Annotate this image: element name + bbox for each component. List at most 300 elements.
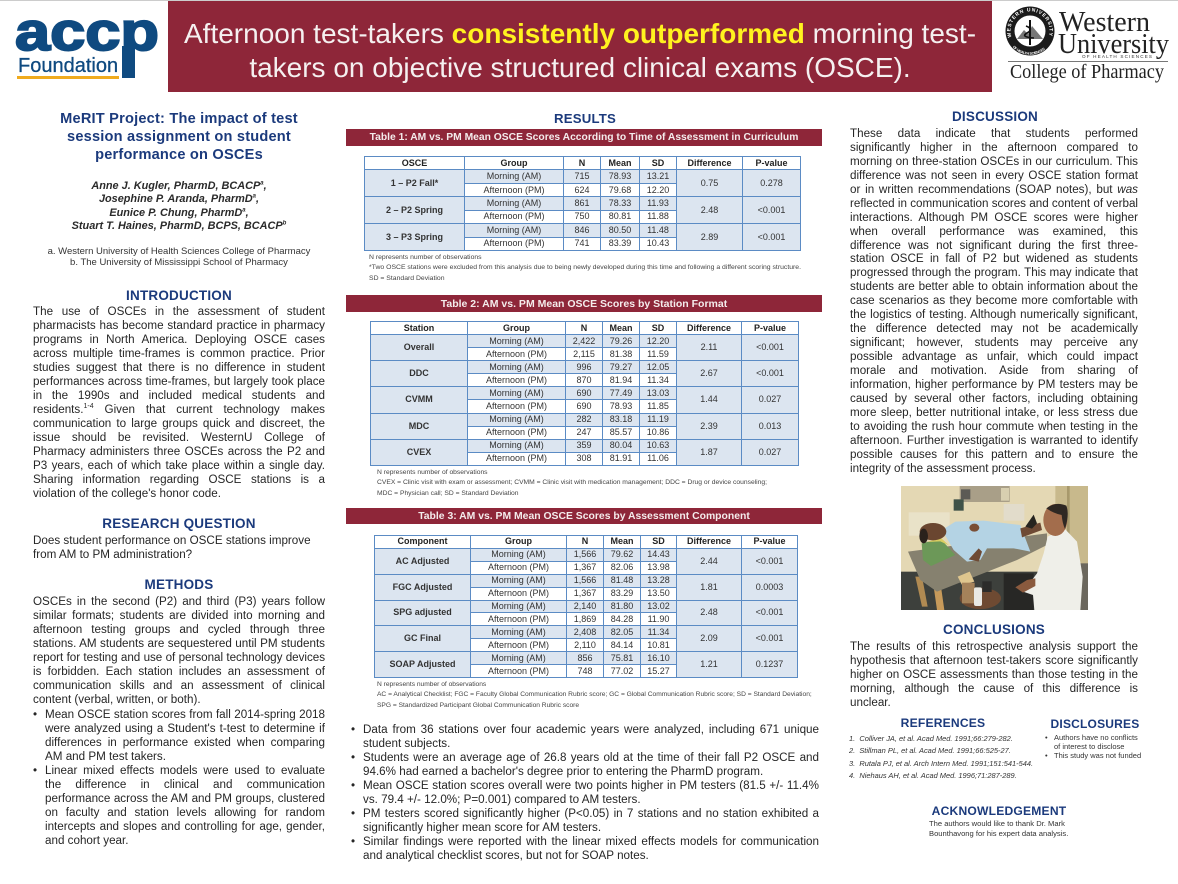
table 2: <0.001: [756, 368, 784, 378]
text: discussion: case scenarios as they become more comfortable with: [850, 294, 1138, 307]
affiliations: [48, 246, 310, 268]
table 1: 3 – P3 Spring: [386, 232, 443, 242]
table 2: Morning (AM): [489, 336, 544, 346]
table 1: 80.81: [609, 211, 631, 221]
text: discussion: These data indicate that students performed: [850, 127, 1138, 140]
table 3 notes: SPG = Standardized Participant Global Communication Rubric score: [377, 702, 579, 709]
table 2: 2,422: [573, 336, 595, 346]
table 2 title bar: Table 2: AM vs. PM Mean OSCE Scores by Station Format: [441, 298, 727, 310]
table 2: 247: [576, 427, 592, 437]
text: •: [33, 708, 37, 721]
table 1: 79.68: [609, 185, 631, 195]
table 1: 846: [574, 225, 590, 235]
table 2: 2.39: [700, 421, 718, 431]
authors: Eunice P. Chung, PharmDa,: [109, 207, 249, 219]
list: methods bullets: on faculty and station levels allowing for random: [45, 806, 325, 819]
table 3 notes: AC = Analytical Checklist; FGC = Faculty Global Communication Rubric score; GC = Global Communication Rubric score; SD = Standard Deviation;: [377, 691, 812, 698]
table 2: 12.05: [647, 362, 669, 372]
table 3: FGC Adjusted: [393, 582, 452, 592]
text: methods: [33, 595, 325, 706]
heading: methods: METHODS: [145, 577, 213, 592]
table 2: 85.57: [610, 427, 632, 437]
list: methods bullets: [33, 708, 325, 847]
table 3: 13.02: [647, 601, 670, 611]
table 3: AC Adjusted: [396, 556, 449, 566]
text: introduction: violation of the college's honor code.: [33, 487, 221, 500]
table 3: 1,869: [574, 614, 596, 624]
heading: acknowledgement: ACKNOWLEDGEMENT: [932, 804, 1066, 818]
text: •: [351, 835, 355, 848]
table 3: <0.001: [756, 556, 783, 566]
table 2: Station: [404, 323, 434, 333]
table 1: 741: [574, 238, 590, 248]
table 2: 2,115: [573, 349, 595, 359]
table 2: 13.03: [647, 388, 669, 398]
table 3: 81.48: [611, 575, 633, 585]
table 2: 2.11: [701, 342, 717, 352]
table 1: 78.93: [609, 171, 631, 181]
text: introduction: P3 years, each of which take place within a single day.: [33, 459, 325, 472]
text: methods: OSCEs in the second (P2) and third (P3) years follow: [33, 595, 325, 608]
list: results bullets: 94.6% had earned a bachelor's degree prior to entering the PharmD program.: [363, 765, 763, 778]
table 1: Morning (AM): [487, 198, 541, 208]
list: references: 2. Stillman PL, et al. Acad Med. 1991;66:525-27.: [849, 746, 1011, 755]
table 2: 996: [576, 362, 592, 372]
list: results bullets: Data from 36 stations over four academic years were analyzed, including 671 unique: [363, 723, 819, 736]
table 1: 11.88: [647, 211, 669, 221]
table 3: 1.21: [700, 659, 718, 669]
table 2: Afternoon (PM): [486, 401, 547, 411]
table 3 title bar: Table 3: AM vs. PM Mean OSCE Scores by Assessment Component: [418, 511, 750, 522]
affiliations: a. Western University of Health Sciences College of Pharmacy: [48, 246, 310, 257]
table 2: 11.34: [647, 375, 669, 385]
table 3: 1,566: [574, 575, 596, 585]
table 2: Morning (AM): [489, 362, 544, 372]
table 2: 308: [576, 453, 592, 463]
text: discussion: interactions. Although PM OSCE scores were higher: [850, 211, 1138, 224]
text: conclusions: The results of this retrospective analysis support the: [850, 640, 1138, 653]
authors: [72, 180, 286, 232]
table 2: 10.63: [647, 440, 669, 450]
table 1: Morning (AM): [487, 225, 541, 235]
text: discussion: significantly higher in the afternoon compared to: [850, 141, 1138, 154]
table 3: 2,110: [574, 640, 596, 650]
list: methods bullets: AM and PM test takers.: [45, 750, 166, 763]
table 1: 750: [574, 211, 590, 221]
table 1: 10.43: [647, 238, 669, 248]
table 2: N: [581, 323, 587, 333]
text: methods: similar formats; students are divided into morning and: [33, 609, 325, 622]
table 3: Afternoon (PM): [488, 562, 549, 572]
list: methods bullets: the difference in clinical and communication: [45, 778, 325, 791]
table 2: 12.20: [647, 336, 669, 346]
table 1: 13.21: [647, 171, 669, 181]
text: methods: stations. AM students are sequestered until PM students: [33, 637, 325, 650]
text: discussion: possible advantage as unfair, which could impact: [850, 350, 1138, 363]
text: research question: Does student performance on OSCE stations improve: [33, 534, 311, 547]
text: discussion: morale and motivation. Aside from sharing of: [850, 364, 1138, 377]
table 2: Morning (AM): [489, 440, 544, 450]
table 3: 2.44: [700, 556, 718, 566]
heading: disclosures: DISCLOSURES: [1051, 717, 1139, 731]
text: introduction: Pharmacy administers three OSCEs across the P2 and: [33, 445, 325, 458]
table 1 title bar: [346, 129, 822, 146]
text: discussion: [850, 127, 1138, 474]
table 1: [364, 156, 801, 251]
table 2: 690: [576, 388, 592, 398]
table 1: 2 – P2 Spring: [386, 205, 443, 215]
table 2: <0.001: [756, 342, 784, 352]
text: introduction: in the 1990s and included medical students and: [33, 389, 325, 402]
logo: Western University College of Pharmacy: WESTERN UNIVERSITY: [1006, 8, 1053, 38]
table 2: CVMM: [405, 394, 433, 404]
table 1: Afternoon (PM): [483, 238, 545, 248]
text: discussion: reflected in communication scores and content of verbal: [850, 197, 1138, 210]
text: introduction: issue should be revisited. WesternU College of: [33, 431, 325, 444]
table 3: Difference: [687, 536, 731, 546]
text: discussion: or in written recommendations (SOAP notes), but was: [850, 183, 1138, 196]
text: discussion: the difference detected may not be academically: [850, 322, 1138, 335]
table 2 notes: N represents number of observations: [377, 469, 488, 476]
table 3: 14.43: [647, 549, 670, 559]
table 3: N: [582, 536, 588, 546]
table 3: 1,367: [574, 588, 596, 598]
table 3: 2,408: [574, 627, 596, 637]
table 3: Afternoon (PM): [488, 640, 549, 650]
table 1: OSCE: [402, 158, 427, 168]
heading: conclusions: CONCLUSIONS: [943, 622, 1045, 637]
table 2: Afternoon (PM): [486, 453, 547, 463]
table 3: 82.05: [611, 627, 633, 637]
logo: ACCP Foundation: accp: [15, 2, 159, 62]
table 1: <0.001: [758, 232, 785, 242]
text: discussion: difference was not significant during the first three-: [850, 238, 1138, 252]
table 1 notes: N represents number of observations: [369, 254, 482, 261]
text: discussion: to avoiding the rush hour commute when testing in the: [850, 420, 1138, 433]
table 2: 10.86: [647, 427, 669, 437]
table 2: [370, 321, 799, 466]
table 2: 77.49: [610, 388, 632, 398]
text: introduction: across multiple time-frames is common practice. Prior: [33, 347, 325, 360]
list: disclosures: [1045, 733, 1141, 760]
text: introduction: performances across time-frames, but largely took place: [33, 375, 325, 388]
heading: introduction: INTRODUCTION: [126, 288, 232, 303]
table 2: 0.027: [759, 447, 781, 457]
table 2: 11.59: [647, 349, 669, 359]
table 2: Group: [503, 323, 530, 333]
table 1: Afternoon (PM): [483, 185, 545, 195]
heading: project title: session assignment on student: [67, 129, 291, 145]
text: discussion: students are better able to obtain information about the: [850, 280, 1138, 293]
table 2: 870: [576, 375, 592, 385]
table 2: Afternoon (PM): [486, 427, 547, 437]
table 3: 0.1237: [756, 659, 783, 669]
text: •: [351, 779, 355, 792]
text: acknowledgement: [929, 819, 1068, 838]
heading: results: RESULTS: [554, 111, 616, 126]
table 1: 80.50: [609, 225, 631, 235]
list: disclosures: of interest to disclose: [1054, 742, 1124, 751]
table 1: 715: [574, 171, 590, 181]
text: conclusions: hypothesis that afternoon test-takers score significantly: [850, 654, 1138, 667]
affiliations: b. The University of Mississippi School of Pharmacy: [70, 257, 288, 268]
text: discussion: difference was not seen in every OSCE station format: [850, 169, 1138, 182]
text: methods: communication skills and an assessment of clinical: [33, 679, 325, 692]
text: introduction: The use of OSCEs in the assessment of student: [33, 305, 325, 318]
table 1 notes: *Two OSCE stations were excluded from this analysis due to being newly developed during this time and following a different scoring structure.: [369, 264, 801, 271]
title banner: [168, 1, 992, 92]
table 2: Difference: [687, 323, 731, 333]
list: disclosures: This study was not funded: [1054, 751, 1141, 760]
table 2: 0.027: [759, 394, 781, 404]
table 1 notes: SD = Standard Deviation: [369, 275, 445, 282]
text: discussion: information, higher performance by PM testers may be: [850, 378, 1138, 391]
table 2: 359: [576, 440, 592, 450]
table 2: MDC: [409, 421, 429, 431]
logo: Western University College of Pharmacy: Western: [1059, 6, 1150, 38]
text: research question: from AM to PM administration?: [33, 548, 192, 561]
text: discussion: station OSCE in fall of P2 but widened as students: [850, 252, 1138, 265]
text: conclusions: morning, although the cause of this difference is: [850, 682, 1138, 695]
table 2: Afternoon (PM): [486, 349, 547, 359]
text: methods: content (verbal, written, or both).: [33, 693, 201, 706]
table 3: 0.0003: [756, 582, 783, 592]
text: introduction: Sharing information regarding OSCE stations is a: [33, 473, 325, 486]
table 3 notes: N represents number of observations: [377, 681, 486, 688]
table 2: 1.87: [700, 447, 718, 457]
table 3: 81.80: [611, 601, 633, 611]
heading: project title: MeRIT Project: The impact of test: [60, 111, 298, 127]
list: references: 4. Niehaus AH, et al. Acad Med. 1996;71:287-289.: [849, 771, 1017, 780]
table 2: 83.18: [610, 414, 632, 424]
table 3 notes: [377, 681, 812, 709]
table 2: 81.91: [610, 453, 632, 463]
table 2: 690: [576, 401, 592, 411]
table 1: P-value: [755, 158, 788, 168]
table 3: 83.29: [611, 588, 633, 598]
table 3: Morning (AM): [491, 575, 546, 585]
table 3: 15.27: [647, 666, 670, 676]
table 3: 11.90: [648, 614, 669, 624]
table 3: Component: [398, 536, 448, 546]
table 3: 79.62: [611, 549, 633, 559]
table 1: 861: [574, 198, 590, 208]
list: results bullets: and analytical checklist scores, but not for SOAP notes.: [363, 849, 649, 862]
text: introduction: communication to large groups quick and discreet, the: [33, 417, 325, 430]
table 3 title bar: [346, 508, 822, 524]
table 1 title bar: Table 1: AM vs. PM Mean OSCE Scores According to Time of Assessment in Curriculum: [370, 132, 798, 143]
table 2: Afternoon (PM): [486, 375, 547, 385]
table 3: Group: [505, 536, 532, 546]
text: •: [33, 764, 37, 777]
text: methods: report for testing and use of personal technology devices: [33, 651, 325, 664]
logo: Western University College of Pharmacy: OF HEALTH SCIENCES: [1013, 46, 1045, 55]
text: conclusions: unclear.: [850, 696, 891, 709]
text: •: [1045, 733, 1048, 742]
logo: Western University College of Pharmacy: OF HEALTH SCIENCES: [1082, 54, 1152, 59]
table 2: Overall: [404, 342, 434, 352]
list: disclosures: Authors have no conflicts: [1054, 733, 1138, 742]
list: references: [849, 734, 1033, 780]
text: •: [351, 807, 355, 820]
logo: ACCP Foundation: Foundation: [18, 55, 118, 77]
authors: Anne J. Kugler, PharmD, BCACPa,: [91, 180, 267, 192]
text: discussion: caused by several other factors, including obtaining: [850, 392, 1138, 405]
table 2: 79.26: [610, 336, 632, 346]
table 2: Mean: [609, 323, 632, 333]
table 2 notes: MDC = Physician call; SD = Standard Deviation: [377, 490, 519, 497]
list: results bullets: PM testers scored significantly higher (P<0.05) in 7 stations and no station exhibited a: [363, 807, 819, 820]
heading: references: REFERENCES: [901, 716, 985, 730]
table 3: 16.10: [647, 653, 670, 663]
table 3: <0.001: [756, 607, 783, 617]
table 2 notes: CVEX = Clinic visit with exam or assessment; CVMM = Clinic visit with medication management; DDC = Drug or device counseling;: [377, 479, 767, 486]
table 2: Morning (AM): [489, 388, 544, 398]
table 2: Morning (AM): [489, 414, 544, 424]
text: discussion: possible causes for this pattern and to ensure the: [850, 448, 1138, 461]
table 3: 2.09: [700, 633, 718, 643]
table 3: SOAP Adjusted: [389, 659, 456, 669]
text: methods: afternoon testing groups and cycled through three: [33, 623, 325, 636]
text: discussion: progressed through the program. This may indicate that: [850, 266, 1138, 279]
text: acknowledgement: The authors would like to thank Dr. Mark: [929, 819, 1065, 828]
table 2: DDC: [409, 368, 429, 378]
table 1: Difference: [687, 158, 732, 168]
table 3: 1,566: [574, 549, 596, 559]
page edge: [0, 0, 1178, 1]
text: conclusions: [850, 640, 1138, 709]
table 3: P-value: [753, 536, 786, 546]
heading: project title: performance on OSCEs: [95, 147, 263, 163]
table 3: Morning (AM): [491, 601, 546, 611]
text: •: [1045, 751, 1048, 760]
table 2: SD: [652, 323, 664, 333]
table 2: 2.67: [700, 368, 718, 378]
text: introduction: studies suggest that there is no difference in student: [33, 361, 325, 374]
list: results bullets: Mean OSCE station scores overall were two points higher in PM testers (81.5 +/- 11.4%: [363, 779, 819, 792]
table 3: [374, 535, 798, 678]
table 3: 13.28: [647, 575, 670, 585]
list: methods bullets: intercepts and slopes and controlling for age, gender,: [45, 820, 325, 833]
table 2: 79.27: [610, 362, 632, 372]
text: methods: is forbidden. Each station includes an assessment of: [33, 665, 325, 678]
table 3: 2.48: [700, 607, 718, 617]
heading: discussion: DISCUSSION: [952, 109, 1038, 124]
list: results bullets: Students were an average age of 26.8 years old at the time of their fall P2 OSCE and: [363, 751, 819, 764]
table 1 notes: [369, 254, 801, 282]
table 1: 624: [574, 185, 590, 195]
logo: Western University College of Pharmacy: College of Pharmacy: [1010, 62, 1164, 83]
list: methods bullets: Linear mixed effects models were used to evaluate: [45, 764, 325, 777]
logo: Western University College of Pharmacy: University: [1058, 28, 1169, 60]
table 1: 2.89: [701, 232, 718, 242]
table 1: 78.33: [609, 198, 631, 208]
text: introduction: programs in North America. Deploying OSCE cases: [33, 333, 325, 346]
list: results bullets: vs. 79.4 +/- 12.0%; P=0.001) compared to AM testers.: [363, 793, 641, 806]
text: discussion: morning on three-station OSCEs in our curriculum. This: [850, 155, 1138, 168]
table 2: 78.93: [610, 401, 632, 411]
text: discussion: integrity of the assessment process.: [850, 462, 1036, 474]
table 3: 1.81: [700, 582, 718, 592]
table 3: 11.34: [648, 627, 669, 637]
table 3: 84.14: [611, 640, 633, 650]
table 3: 84.28: [611, 614, 633, 624]
table 3: GC Final: [404, 633, 441, 643]
title banner: takers on objective structured clinical exams (OSCE).: [249, 52, 911, 83]
table 1: 83.39: [609, 238, 631, 248]
table 1: Group: [500, 158, 528, 168]
table 3: 748: [577, 666, 593, 676]
list: methods bullets: performance across the AM and PM groups, clustered: [45, 792, 325, 805]
table 1: 1 – P2 Fall*: [391, 178, 438, 188]
table 3: Morning (AM): [491, 627, 546, 637]
table 1: Morning (AM): [487, 171, 541, 181]
table 2: P-value: [754, 323, 786, 333]
text: research question: [33, 534, 311, 561]
table 3: 856: [577, 653, 593, 663]
table 2: 81.94: [610, 375, 632, 385]
table 2 notes: [377, 469, 767, 497]
table 2: 282: [576, 414, 592, 424]
table 3: Afternoon (PM): [488, 666, 549, 676]
text: •: [351, 751, 355, 764]
heading: research question: RESEARCH QUESTION: [102, 516, 256, 531]
table 2: 11.19: [647, 414, 669, 424]
list: methods bullets: were analyzed using a Student's t-test to determine if: [45, 722, 325, 735]
list: references: 1. Colliver JA, et al. Acad Med. 1991;66:279-282.: [849, 734, 1013, 743]
table 3: Afternoon (PM): [488, 588, 549, 598]
list: methods bullets: Mean OSCE station scores from fall 2014-spring 2018: [45, 708, 325, 721]
text: introduction: pharmacists has become standard practice in pharmacy: [33, 319, 325, 332]
table 3: 2,140: [574, 601, 596, 611]
table 3: Mean: [610, 536, 634, 546]
table 3: Morning (AM): [491, 549, 546, 559]
table 1: 2.48: [701, 205, 718, 215]
text: discussion: more sleep, better nutritional intake, or less stress due: [850, 406, 1138, 419]
table 2 title bar: [346, 295, 822, 312]
list: results bullets: Similar findings were reported with the linear mixed effects models for communication: [363, 835, 819, 848]
text: •: [351, 723, 355, 736]
table 1: SD: [652, 158, 664, 168]
table 3: 13.98: [647, 562, 670, 572]
list: methods bullets: and cohort year.: [45, 834, 128, 847]
table 2: 0.013: [759, 421, 781, 431]
table 3: <0.001: [756, 633, 783, 643]
table 2: 80.04: [610, 440, 632, 450]
authors: Stuart T. Haines, PharmD, BCPS, BCACPb: [72, 220, 286, 232]
table 3: 77.02: [611, 666, 633, 676]
table 2: CVEX: [407, 447, 431, 457]
table 1: 11.93: [647, 198, 669, 208]
text: conclusions: higher on OSCE assessments than those testing in the: [850, 668, 1138, 681]
text: introduction: [33, 305, 325, 500]
table 2: 81.38: [610, 349, 632, 359]
table 1: Mean: [608, 158, 632, 168]
authors: Josephine P. Aranda, PharmDa,: [99, 193, 259, 205]
title banner: Afternoon test-takers consistently outperformed morning test-: [184, 18, 976, 49]
logo: Western University College of Pharmacy: [1006, 6, 1169, 83]
table 3: 75.81: [611, 653, 633, 663]
table 3: 10.81: [647, 640, 670, 650]
list: references: 3. Rutala PJ, et al. Arch Intern Med. 1991;151:541-544.: [849, 759, 1033, 768]
table 3: 82.06: [611, 562, 633, 572]
list: methods bullets: differences in performance existed when comparing: [45, 736, 325, 749]
list: results bullets: significantly higher mean score for AM testers.: [363, 821, 601, 834]
table 2: 11.85: [647, 401, 669, 411]
table 1: 12.20: [647, 185, 669, 195]
heading: project title: [60, 111, 298, 163]
table 1: Afternoon (PM): [483, 211, 545, 221]
